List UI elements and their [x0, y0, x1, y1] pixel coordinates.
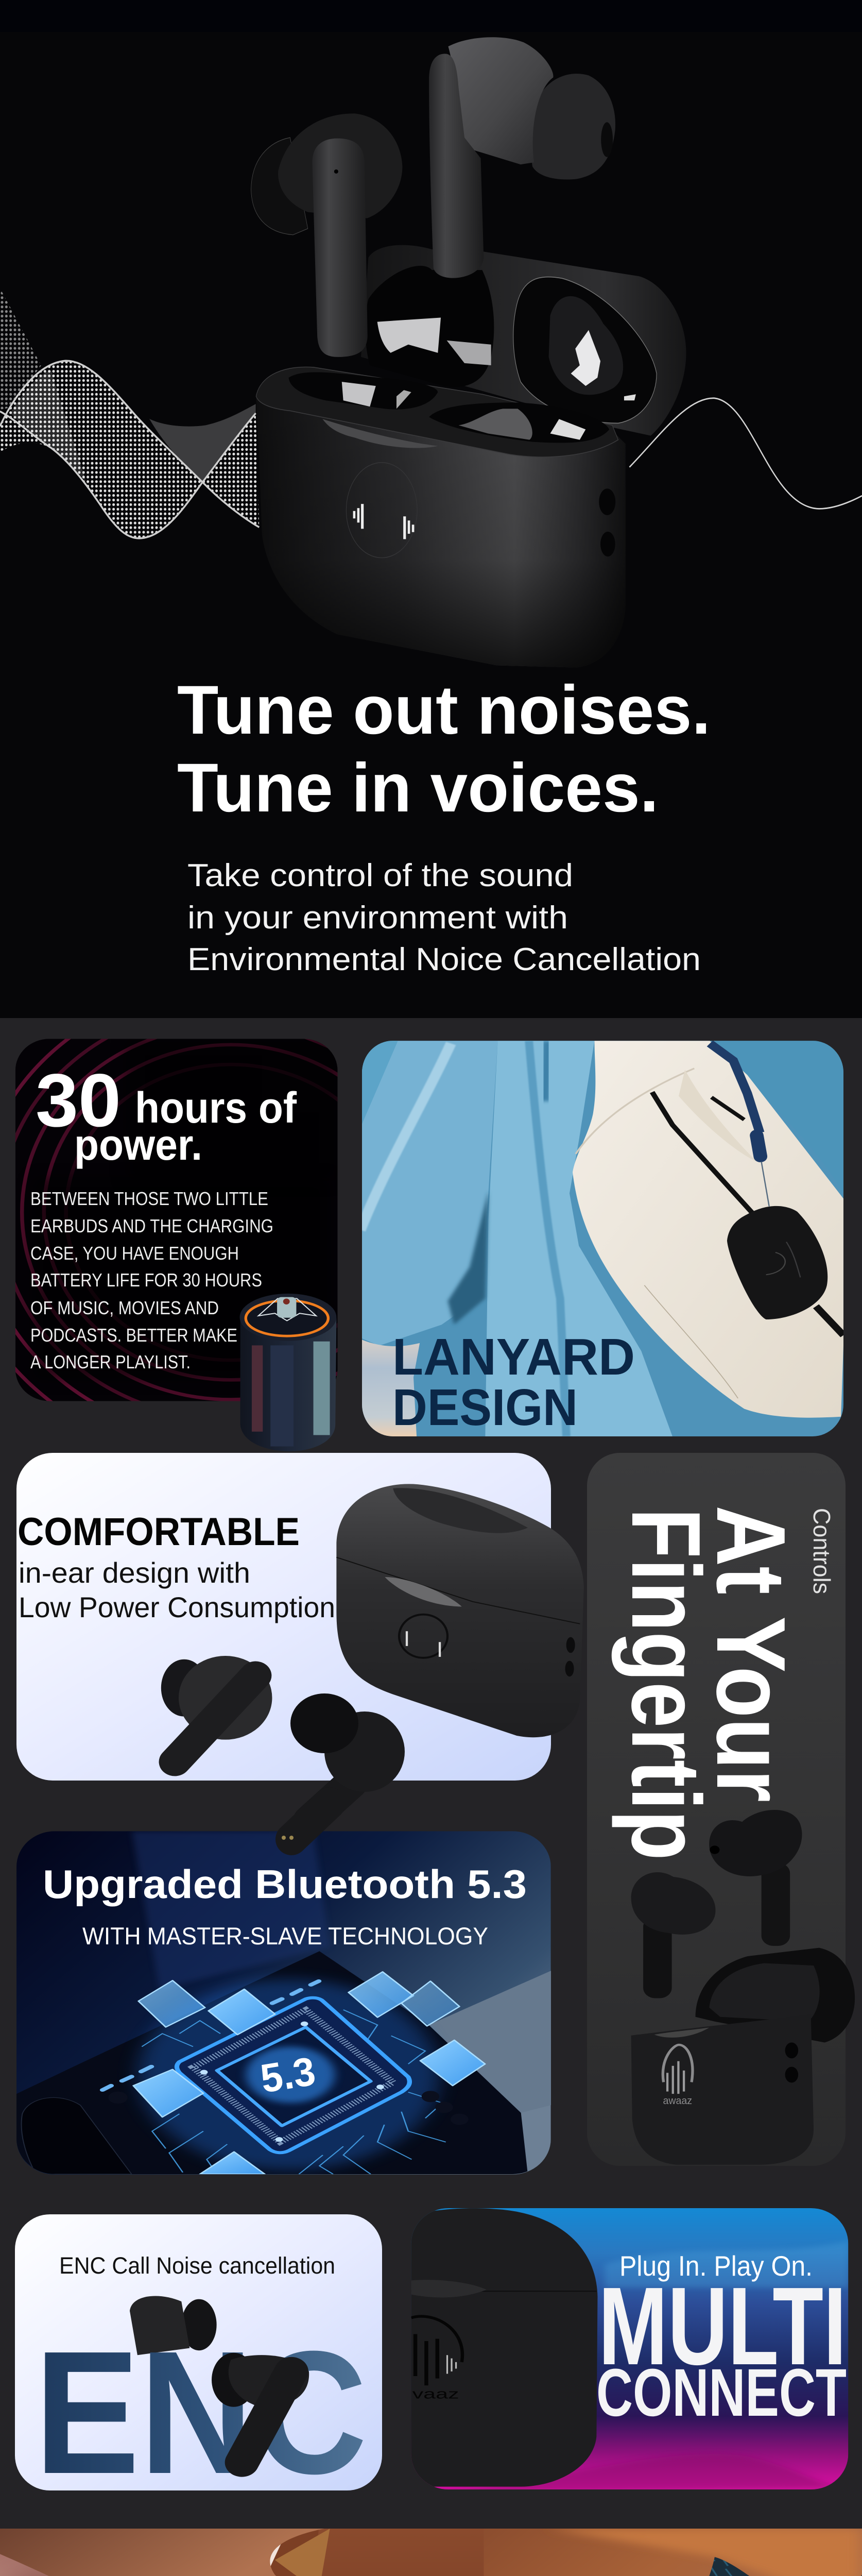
panel: photo and feature list [0, 2529, 862, 2576]
caption: ENC Call Noise cancellation [59, 2252, 335, 2279]
sound wave left [0, 288, 259, 538]
card background [16, 1453, 551, 1781]
tagline: Plug In. Play On. [619, 2250, 813, 2282]
gradient background with case [411, 2208, 848, 2493]
left earbud [251, 113, 402, 357]
body text: BETWEEN THOSE TWO LITTLE [30, 1188, 268, 1209]
heading [36, 1058, 297, 1169]
right earbud [429, 37, 615, 278]
hero sub text [187, 858, 701, 977]
icon: battery [239, 1294, 336, 1451]
body text: BATTERY LIFE FOR 30 HOURS [30, 1269, 262, 1291]
chip outer [177, 1998, 409, 2153]
body text: PODCASTS. BETTER MAKE [30, 1325, 237, 1346]
card background [587, 1453, 846, 2166]
body text: CASE, YOU HAVE ENOUGH [30, 1243, 239, 1264]
panel: 30 hours of power [15, 1039, 338, 1451]
panel: comfortable [16, 1453, 584, 1821]
sub heading: WITH MASTER-SLAVE TECHNOLOGY [82, 1922, 488, 1950]
panel: enc [15, 2214, 382, 2511]
charging case [336, 1484, 584, 1737]
panel: lanyard design [360, 1041, 843, 1436]
heading: hours of [135, 1083, 297, 1132]
heading [395, 1339, 633, 1426]
large ENC letters: ENC [35, 2315, 367, 2511]
earbud left [161, 1656, 272, 1762]
hero sub text: in your environment with [187, 900, 568, 936]
heading: Upgraded Bluetooth 5.3 [43, 1861, 527, 1907]
body text: EARBUDS AND THE CHARGING [30, 1215, 273, 1236]
photo: finger touching earbud [0, 2529, 862, 2576]
earbud front [212, 2353, 309, 2463]
panel: multi connect [411, 2208, 848, 2493]
heading: COMFORTABLE [18, 1510, 300, 1554]
sub text: Low Power Consumption [19, 1591, 335, 1623]
chip illustration background [16, 1831, 551, 2175]
body text: OF MUSIC, MOVIES AND [30, 1297, 219, 1318]
case body [256, 367, 626, 668]
heading: DESIGN [392, 1379, 578, 1436]
heading: power. [74, 1121, 202, 1169]
photo: denim and sling bag [360, 1041, 843, 1436]
earbud upper [709, 1810, 802, 1946]
open case [631, 1948, 855, 2165]
earbud behind [130, 2296, 217, 2355]
sound wave right [629, 398, 862, 509]
case on lanyard [727, 1206, 827, 1319]
earbud right [290, 1693, 405, 1821]
heading: fingertip: Fingertip [611, 1508, 720, 1860]
chip illustration [15, 1951, 551, 2174]
hero sub text: Take control of the sound [187, 858, 573, 893]
shirt inner and strap [264, 2539, 283, 2569]
card background with arcs [15, 1039, 338, 1401]
earbuds and charging case [251, 37, 686, 668]
label on chip: 5.3: 5.3 [257, 2048, 318, 2102]
chip inner die [217, 2027, 371, 2126]
earbuds and case [631, 1810, 855, 2165]
panel: bluetooth [15, 1831, 551, 2175]
heading: LANYARD [392, 1328, 635, 1386]
finger [0, 2529, 498, 2576]
body text [30, 1188, 273, 1372]
heading: at your: At Your [696, 1505, 805, 1802]
heading: 30 [36, 1058, 121, 1142]
shirt [0, 2551, 489, 2576]
panel: hero [0, 0, 862, 1018]
hero sub text: Environmental Noice Cancellation [187, 942, 701, 977]
earbud stem overlapping bluetooth card [282, 1803, 330, 1840]
tiles [133, 1972, 485, 2174]
earbud lower [631, 1872, 716, 1998]
panel: at your fingertip controls [587, 1453, 855, 2166]
gradient background with case: vaaz [412, 2386, 459, 2402]
card background [15, 2214, 382, 2490]
panel: feature cards [15, 1039, 855, 2511]
hero headline: Tune in voices. [177, 750, 659, 826]
sub text [19, 1556, 335, 1623]
sling bag [573, 1041, 843, 1418]
hero top band [0, 0, 862, 32]
hero headline [177, 672, 711, 826]
body text: A LONGER PLAYLIST. [30, 1351, 191, 1372]
sub text: in-ear design with [19, 1556, 250, 1589]
label: controls: Controls [808, 1508, 835, 1594]
open case: awaaz [663, 2095, 692, 2107]
beard [621, 2557, 862, 2576]
skin [473, 2529, 862, 2576]
hero headline: Tune out noises. [177, 672, 711, 749]
hero background [0, 0, 862, 1018]
case lid [361, 245, 686, 436]
lanyard [710, 1043, 760, 1133]
